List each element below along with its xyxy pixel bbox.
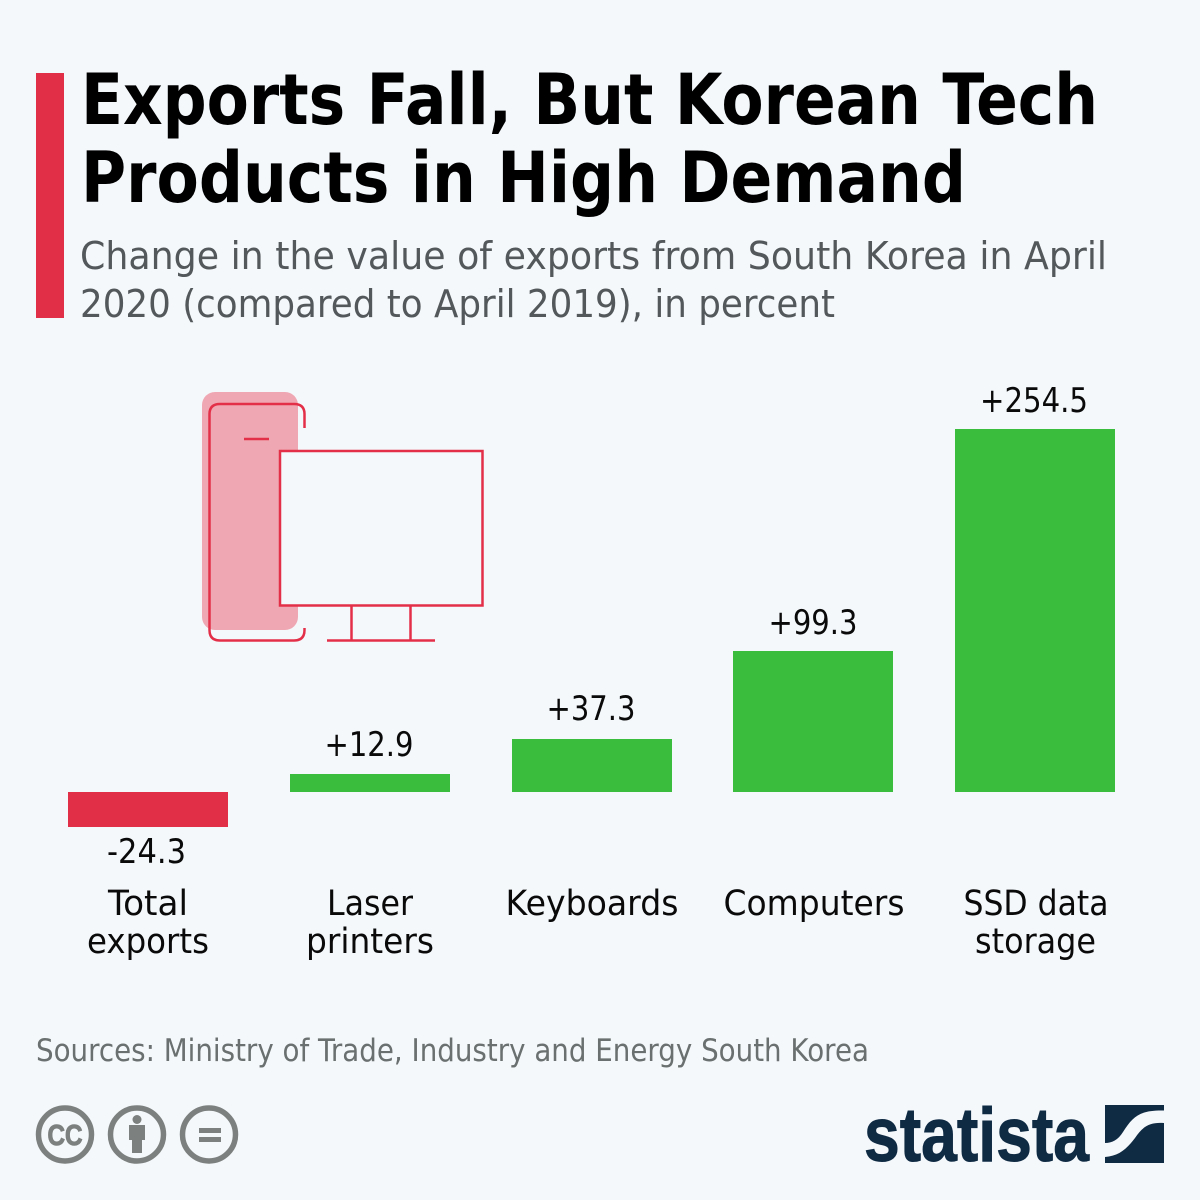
category labels: Computers bbox=[724, 884, 904, 924]
bar: Total exports bbox=[68, 792, 228, 827]
value labels: +12.9 bbox=[324, 725, 414, 765]
bar: Keyboards bbox=[512, 739, 672, 792]
bar: SSD data storage bbox=[955, 429, 1115, 792]
title: Products in High Demand bbox=[81, 137, 966, 219]
icon: creative commons licence badges: CC bbox=[48, 1120, 83, 1152]
value labels: -24.3 bbox=[107, 832, 186, 872]
bar: Laser printers bbox=[290, 774, 450, 792]
logo: statista: statista bbox=[864, 1093, 1090, 1178]
subtitle: Change in the value of exports from South Korea in April bbox=[80, 234, 1107, 278]
title bbox=[81, 59, 1098, 219]
icon: creative commons licence badges bbox=[38, 1108, 236, 1161]
value labels: +99.3 bbox=[768, 603, 858, 643]
icon: desktop computer bbox=[202, 392, 482, 640]
value labels bbox=[107, 381, 1088, 872]
category labels bbox=[87, 884, 1108, 962]
category labels: Laser bbox=[327, 884, 414, 924]
category labels: exports bbox=[87, 922, 209, 962]
bar: Computers bbox=[733, 651, 893, 792]
source: Sources: Ministry of Trade, Industry and Energy South Korea bbox=[36, 1033, 869, 1069]
bar chart bbox=[68, 429, 1115, 827]
category labels: Total bbox=[107, 884, 188, 924]
category labels: printers bbox=[306, 922, 434, 962]
subtitle: 2020 (compared to April 2019), in percent bbox=[80, 282, 835, 326]
value labels: +254.5 bbox=[980, 381, 1088, 421]
subtitle bbox=[80, 234, 1107, 326]
category labels: SSD data bbox=[964, 884, 1108, 924]
accent bar bbox=[36, 73, 64, 318]
category labels: Keyboards bbox=[506, 884, 678, 924]
category labels: storage bbox=[975, 922, 1096, 962]
value labels: +37.3 bbox=[546, 689, 636, 729]
